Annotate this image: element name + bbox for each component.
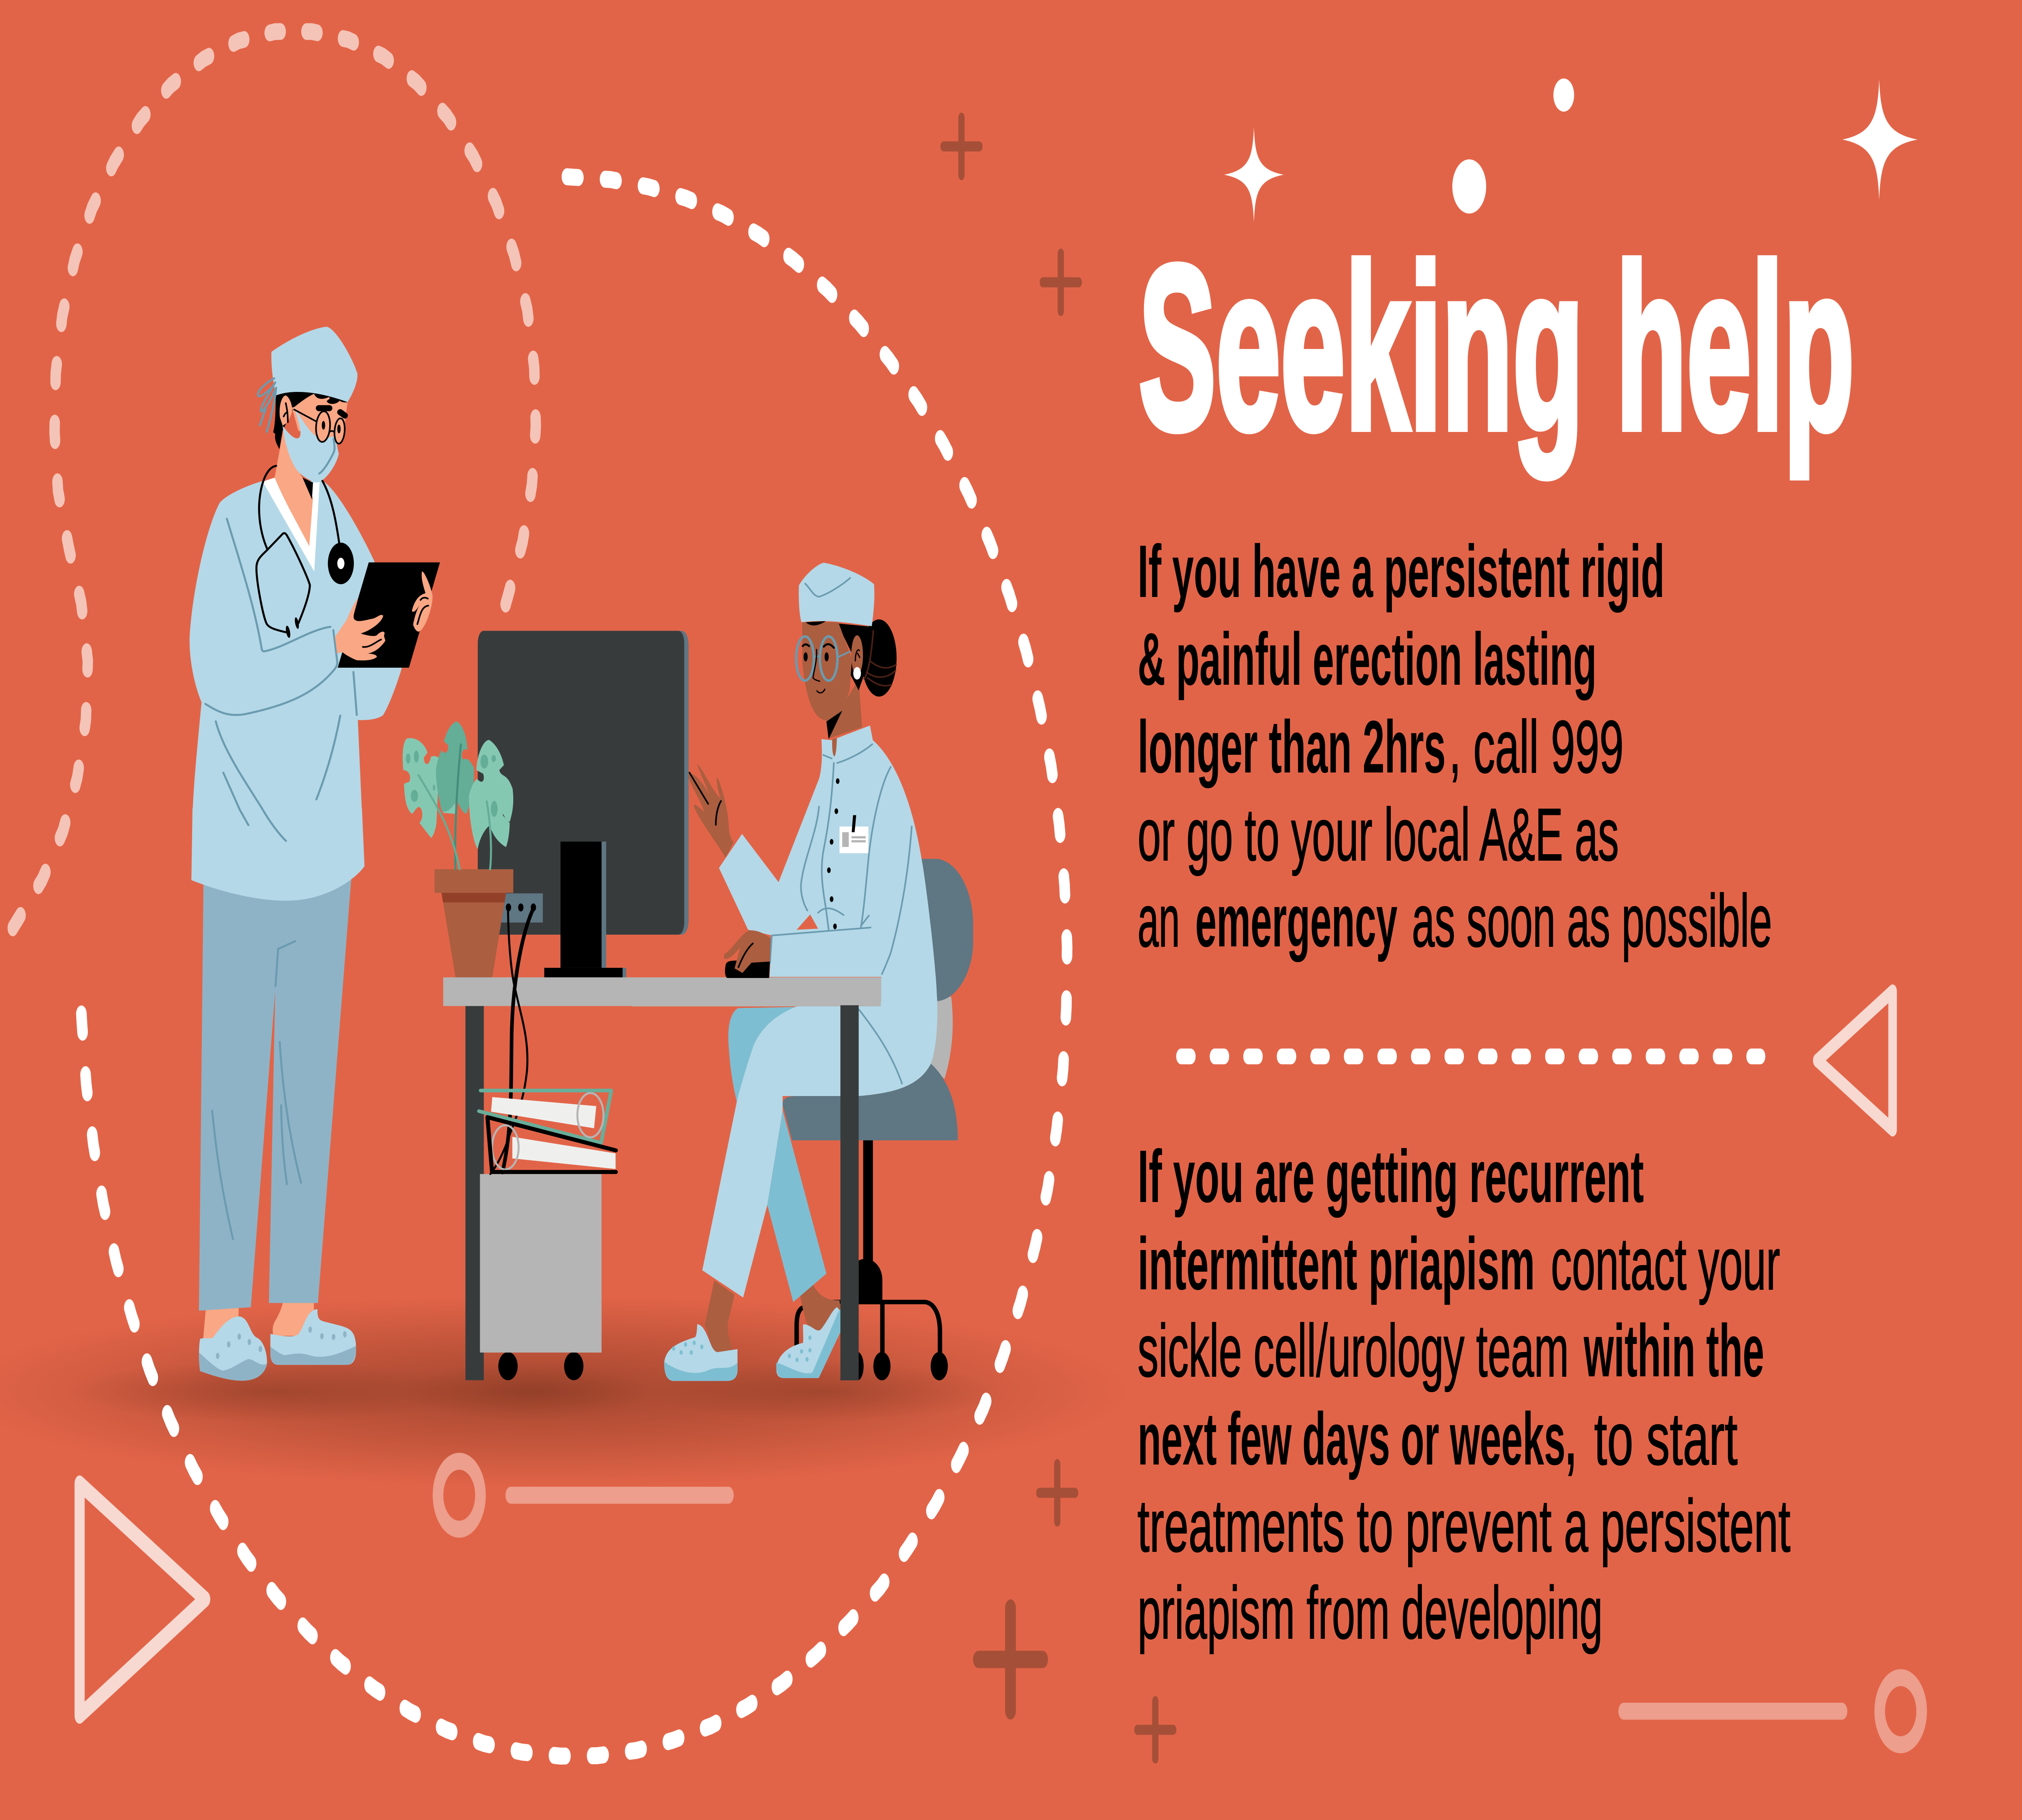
- mouse and hand on mouse: [724, 930, 771, 978]
- icon: triangle outline right: [1817, 991, 1893, 1130]
- plant leaves: [403, 722, 513, 869]
- collar notch: [832, 738, 837, 756]
- office chair: [783, 859, 973, 1380]
- power strip: [501, 893, 543, 923]
- dashed arc: pink top-left: [13, 32, 536, 928]
- text block: emergency advice: , call 999: [1449, 705, 1624, 789]
- desktop: [443, 978, 883, 1006]
- surgical cap: [271, 327, 357, 402]
- nurse trousers: [702, 997, 937, 1297]
- glasses and features: [796, 578, 860, 693]
- text block: emergency advice: or go to your local A&E as: [1138, 793, 1619, 876]
- nurse body: [719, 726, 937, 1005]
- text block: emergency advice: [1138, 529, 1772, 963]
- text block: emergency advice: longer than 2hrs: [1138, 705, 1446, 789]
- underarm gap: [797, 914, 818, 930]
- hair and bun: [837, 619, 897, 696]
- nurse shoes: [664, 1280, 841, 1381]
- uniform lines: [770, 744, 912, 1084]
- left desk leg: [465, 1004, 484, 1380]
- coat lines: [205, 519, 357, 810]
- text block: recurrent priapism advice: contact your: [1551, 1222, 1780, 1306]
- ear: [279, 396, 292, 425]
- title: Seeking help: [1139, 217, 1854, 479]
- ring and bar: bottom-right: [1624, 1678, 1922, 1745]
- right desk top and leg: [632, 978, 881, 1380]
- text block: recurrent priapism advice: priapism from developing: [1138, 1571, 1603, 1655]
- text block: recurrent priapism advice: within the: [1584, 1309, 1764, 1393]
- ring and bar: bottom-centre: [438, 1461, 728, 1529]
- text block: emergency advice: emergency: [1195, 879, 1398, 963]
- icon: triangle outline bottom-left: [80, 1484, 205, 1716]
- face: [292, 393, 347, 444]
- ear and earring: [851, 635, 863, 679]
- text block: recurrent priapism advice: If you are getting recurrent: [1138, 1134, 1644, 1218]
- coat: [190, 481, 402, 810]
- surgical mask: [283, 407, 339, 483]
- floor shadow: [0, 1294, 1137, 1488]
- illustration: doctor standing: [190, 327, 440, 1381]
- doctor legs and coat hem: [191, 808, 364, 1381]
- collar: [263, 478, 320, 571]
- icon: plus signs: [943, 118, 1173, 1759]
- neck: [827, 679, 862, 739]
- name badge: [840, 815, 868, 853]
- filing cabinet: [480, 1174, 602, 1380]
- raised hand: [688, 764, 734, 858]
- text block: emergency advice: as soon as possible: [1412, 879, 1772, 963]
- text block: emergency advice: an: [1138, 879, 1180, 963]
- text block: emergency advice: & painful erection lasting: [1138, 617, 1597, 701]
- buttons: [827, 778, 840, 929]
- hands: [335, 571, 433, 660]
- doctor shoes: [199, 1309, 356, 1381]
- text block: recurrent priapism advice: intermittent priapism: [1138, 1222, 1535, 1306]
- text block: recurrent priapism advice: to start: [1594, 1397, 1738, 1481]
- doctor upper body: [190, 327, 440, 810]
- dashed arc: white large circle: [81, 177, 1067, 1756]
- text block: recurrent priapism advice: sickle cell/urology team: [1138, 1309, 1569, 1393]
- text block: emergency advice: If you have a persistent rigid: [1138, 529, 1665, 613]
- plant pot: [434, 869, 513, 978]
- back leg: [728, 1007, 841, 1332]
- stethoscope: [256, 466, 354, 639]
- binders: [479, 1090, 616, 1172]
- tablet: [338, 563, 440, 668]
- nurse cap: [799, 563, 874, 626]
- icon: sparkles and dots: [1224, 78, 1918, 222]
- hair fringe: [276, 391, 347, 407]
- illustration: nurse seated: [632, 563, 973, 1381]
- text block: recurrent priapism advice: next few days or weeks,: [1138, 1397, 1576, 1481]
- face details: [258, 378, 346, 474]
- dashed divider: [1181, 1048, 1760, 1064]
- face: [802, 622, 852, 720]
- illustration: desk and equipment: [403, 631, 883, 1380]
- monitor: [478, 631, 689, 978]
- cables: [491, 908, 533, 1174]
- text block: recurrent priapism advice: treatments to prevent a persistent: [1137, 1484, 1790, 1568]
- text block: recurrent priapism advice: [1137, 1134, 1791, 1655]
- lens fill: [315, 410, 332, 444]
- hair back: [273, 396, 294, 449]
